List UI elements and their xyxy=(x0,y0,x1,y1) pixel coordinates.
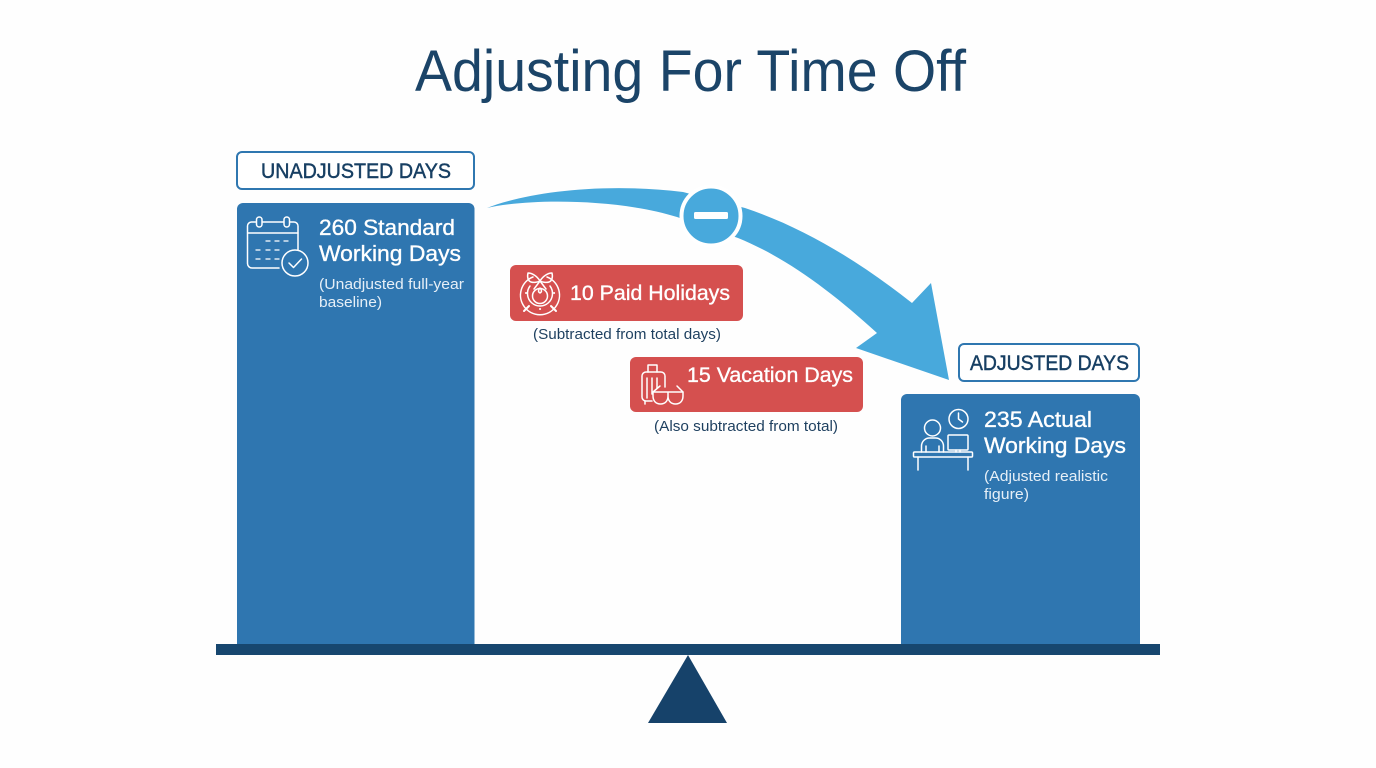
callout: 15 vacation days xyxy=(630,357,863,412)
text: 260 standard working days: Working Days xyxy=(319,241,461,266)
text: 260 standard working days: 260 Standard xyxy=(319,215,455,240)
text: 260 standard working days: (Unadjusted full-year xyxy=(319,276,464,293)
icon: person at desk with clock xyxy=(914,410,972,470)
text: 235 actual working days: (Adjusted realistic xyxy=(984,468,1109,485)
label: unadjusted days: UNADJUSTED DAYS xyxy=(261,160,451,183)
icon: holiday wreath xyxy=(520,273,560,315)
icon: suitcase and glasses xyxy=(642,365,683,404)
balance fulcrum xyxy=(648,655,727,723)
bar: 260 standard working days xyxy=(237,203,474,644)
label: adjusted days: ADJUSTED DAYS xyxy=(970,352,1129,375)
panel: unadjusted days xyxy=(237,152,474,644)
text: 235 actual working days: figure) xyxy=(984,486,1029,503)
panel: adjusted days xyxy=(901,344,1140,644)
callout: 10 paid holidays: 10 Paid Holidays xyxy=(570,282,730,305)
text: also subtracted from total: (Also subtracted from total) xyxy=(654,418,838,435)
bar: 235 actual working days xyxy=(901,394,1140,644)
text: 235 actual working days xyxy=(984,407,1126,503)
title: Adjusting For Time Off xyxy=(415,39,967,104)
arrow: curved subtraction arrow xyxy=(487,188,949,380)
balance beam xyxy=(216,644,1160,655)
icon: minus circle xyxy=(682,186,740,246)
text: subtracted from total days: (Subtracted from total days) xyxy=(533,326,721,343)
text: 235 actual working days: 235 Actual xyxy=(984,407,1092,432)
callout: 15 vacation days: 15 Vacation Days xyxy=(687,364,853,387)
text: 260 standard working days xyxy=(319,215,464,311)
text: 235 actual working days: Working Days xyxy=(984,433,1126,458)
label: adjusted days xyxy=(959,344,1139,381)
callout: 10 paid holidays xyxy=(510,265,743,321)
text: 260 standard working days: baseline) xyxy=(319,294,382,311)
label: unadjusted days xyxy=(237,152,474,189)
icon: calendar with check xyxy=(248,217,308,276)
